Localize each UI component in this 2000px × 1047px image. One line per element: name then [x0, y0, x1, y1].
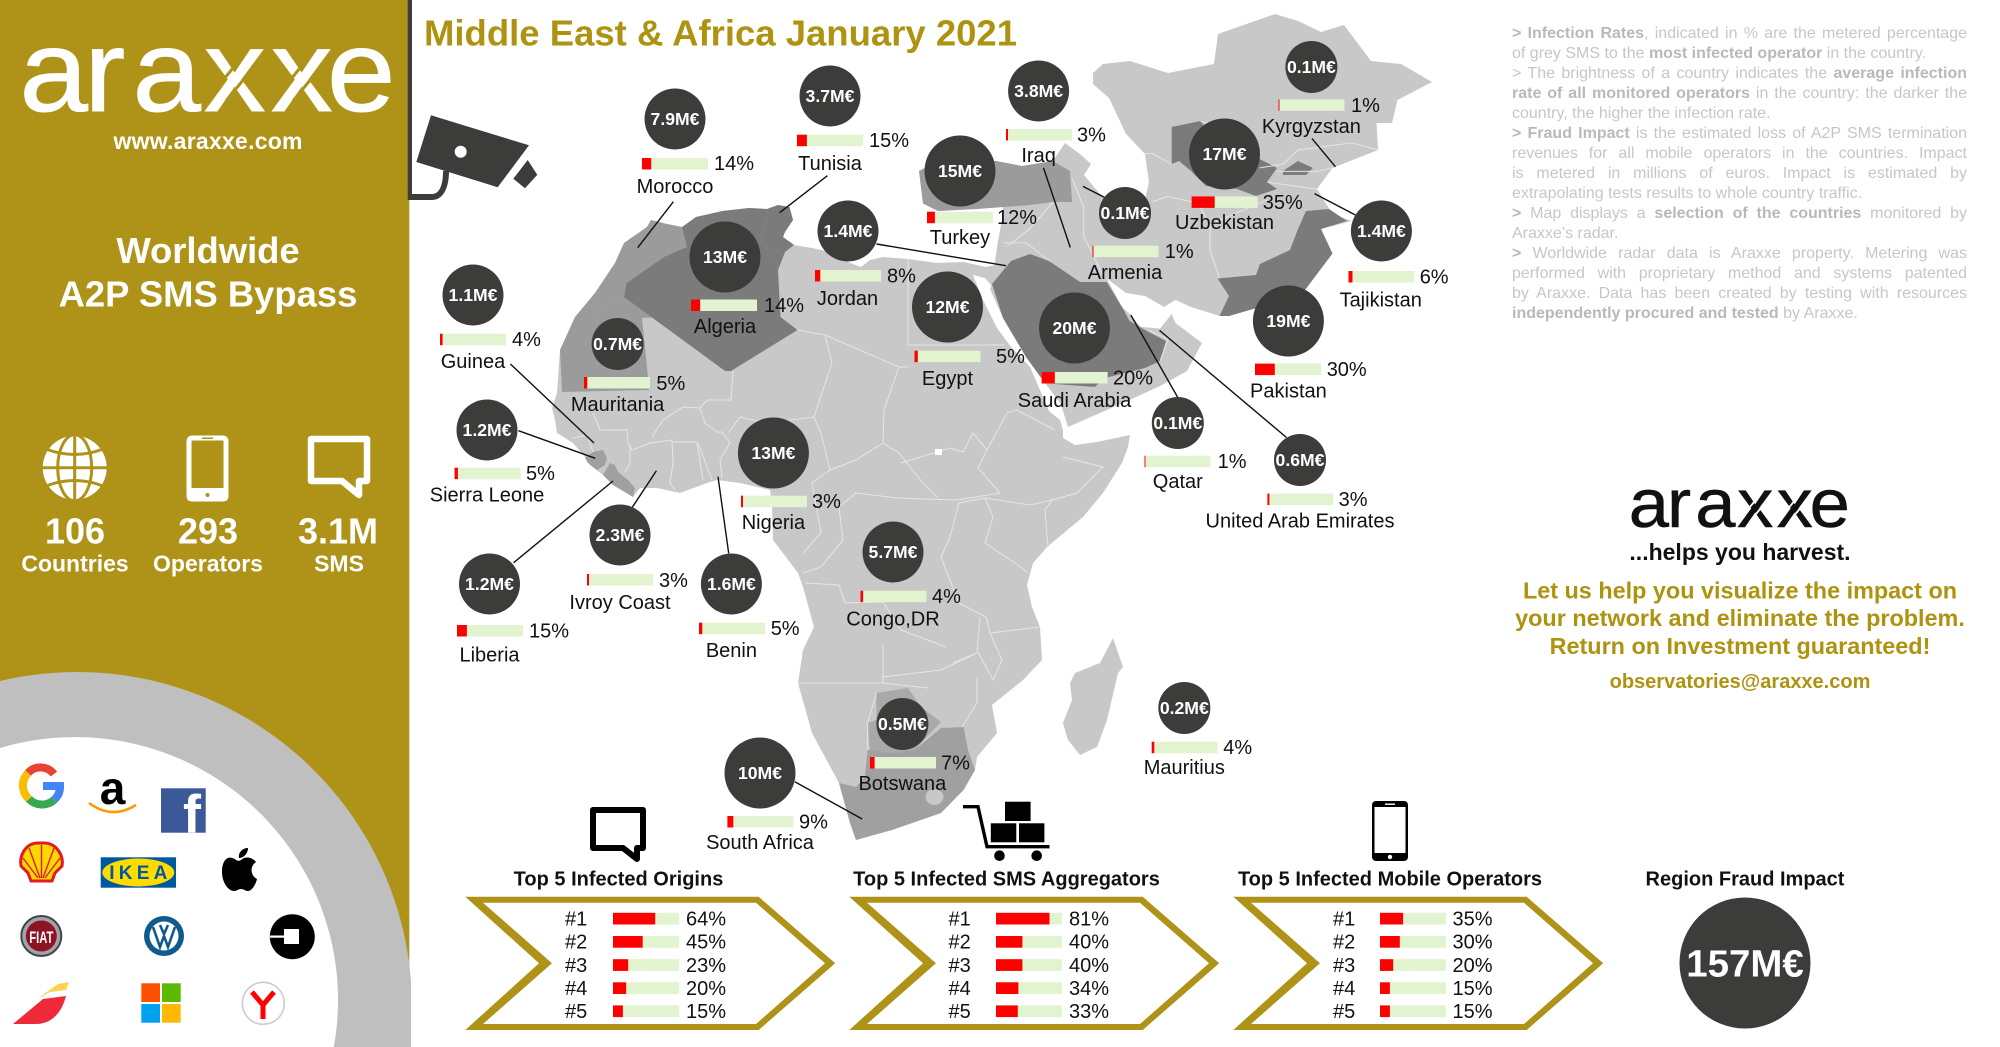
row 3: #3 [948, 955, 971, 977]
title: Middle East & Africa January 2021 [424, 12, 1017, 54]
row 3 [948, 955, 1109, 977]
country: Algeria [690, 222, 804, 338]
country: Saudi Arabia: Saudi Arabia [1018, 390, 1132, 412]
map: Uzbekistan [1172, 121, 1277, 196]
country: United Arab Emirates: United Arab Emirates [1206, 510, 1394, 532]
map: Madagascar [1063, 638, 1123, 755]
country: Benin: 5% [771, 618, 800, 640]
row 2: 40% [1069, 932, 1109, 954]
stat: operators [153, 511, 263, 576]
map: Sierra Leone [585, 450, 607, 470]
heading: aggregators: Top 5 Infected SMS Aggregators [853, 869, 1160, 891]
methodology notes: country, the higher the infection rate. [1512, 105, 1771, 122]
map: Algeria [624, 208, 798, 371]
country: Turkey [924, 136, 1037, 249]
country: Sierra Leone: 5% [526, 463, 555, 485]
logo: uber [270, 914, 315, 959]
country: Jordan: 1.4M€ [824, 221, 873, 241]
country: Tunisia [797, 66, 909, 175]
sidebar heading: A2P SMS Bypass [59, 274, 357, 314]
heading: origins: Top 5 Infected Origins [514, 869, 723, 891]
country: Tunisia: 15% [869, 130, 909, 152]
row 3: 23% [686, 955, 726, 977]
map: Kyrgyz area [1283, 161, 1313, 175]
row 3: 20% [1452, 955, 1493, 977]
map: Botswana [868, 688, 941, 753]
country: Egypt: 5% [996, 346, 1025, 368]
country: Botswana [858, 698, 970, 795]
country: Algeria: Algeria [694, 316, 757, 338]
country: United Arab Emirates: 0.6M€ [1276, 450, 1325, 470]
icon: globe [40, 434, 110, 502]
methodology notes: > Map displays a selection of the countries monitored by [1512, 205, 1967, 222]
row 1: #1 [948, 908, 971, 930]
row 2 [1333, 932, 1493, 954]
country: Kyrgyzstan: 0.1M€ [1287, 57, 1336, 77]
country: Algeria: 14% [764, 295, 804, 317]
country: Pakistan: 19M€ [1266, 311, 1311, 331]
map: Pakistan [1218, 209, 1347, 316]
country: United Arab Emirates: 3% [1339, 489, 1368, 511]
methodology notes [1512, 25, 1967, 322]
row 3: 40% [1069, 955, 1109, 977]
chevron panel: top origins [465, 897, 835, 1030]
logo: iberia [13, 982, 69, 1024]
country: Liberia: Liberia [459, 645, 520, 667]
map: Lesotho [926, 789, 944, 805]
map: Morocco and Western Sahara [560, 220, 687, 350]
logo: facebook: f [183, 785, 202, 845]
country: Qatar: 1% [1218, 451, 1247, 473]
stat: operators: 293 [178, 511, 238, 552]
country: Saudi Arabia [1018, 292, 1153, 412]
chevron panel: top mobile operators [1233, 897, 1603, 1030]
sidebar heading: Worldwide [116, 230, 300, 271]
row 4: 34% [1069, 978, 1109, 1000]
country: Benin: Benin [706, 640, 757, 662]
stat: countries: Countries [21, 550, 129, 576]
row 4 [565, 978, 726, 1000]
row 1: 81% [1069, 908, 1109, 930]
call to action: Let us help you visualize the impact on [1523, 577, 1957, 603]
country: Iraq: 3% [1077, 124, 1106, 146]
row 3 [1333, 955, 1493, 977]
row 1 [948, 908, 1109, 930]
row 5: 15% [1452, 1001, 1493, 1023]
methodology notes: extrapolating tests results to whole country traffic. [1512, 185, 1862, 202]
row 2: #2 [1333, 932, 1355, 954]
logo: google [23, 767, 60, 805]
country: Iraq: Iraq [1021, 145, 1056, 167]
country: Saudi Arabia: 20M€ [1052, 318, 1097, 338]
country: Tunisia: 3.7M€ [806, 86, 855, 106]
row 5: #5 [1333, 1001, 1355, 1023]
country: South Africa [706, 738, 828, 854]
map: Tunisia [760, 205, 794, 270]
stat: countries [21, 511, 129, 576]
country: Mauritius: 0.2M€ [1160, 698, 1209, 718]
country: Saudi Arabia: 20% [1113, 368, 1153, 390]
row 3 [565, 955, 726, 977]
row 5 [1333, 1001, 1493, 1023]
country: Armenia: 0.1M€ [1101, 203, 1150, 223]
country: Liberia: 1.2M€ [465, 574, 514, 594]
methodology notes: rate of all monitored operators in the country: the darker the [1512, 85, 1967, 102]
row 3: #3 [1333, 955, 1355, 977]
logo: fiat: FIAT [29, 928, 54, 947]
country: Mauritius: Mauritius [1144, 757, 1225, 779]
country: Guinea [440, 264, 541, 373]
country: Egypt [912, 272, 1025, 390]
icon: message bubble [311, 439, 367, 495]
methodology notes: of grey SMS to the most infected operator in the country. [1512, 45, 1926, 62]
methodology notes: independently procured and tested by Araxxe. [1512, 305, 1858, 322]
call to action: Return on Investment guaranteed! [1550, 633, 1930, 659]
country: Guinea: 1.1M€ [449, 285, 498, 305]
country: Congo DR: 5.7M€ [869, 542, 918, 562]
row 1: #1 [1333, 908, 1355, 930]
heading: region fraud impact: Region Fraud Impact [1646, 869, 1845, 891]
country: South Africa: 9% [799, 812, 828, 834]
country: Liberia: 15% [529, 620, 569, 642]
icon: mobile phone [1372, 801, 1408, 861]
map: Mauritania [560, 297, 660, 392]
call to action [1515, 577, 1965, 659]
map: African borders [573, 259, 1103, 750]
leader lines [510, 139, 1355, 819]
methodology notes: performed with proprietary method and systems patented [1512, 265, 1967, 282]
icon: cart [963, 802, 1050, 861]
row 2: #2 [948, 932, 971, 954]
methodology notes: Araxxe’s radar. [1512, 225, 1618, 242]
logo: facebook [161, 785, 206, 845]
panel: left sidebar [0, 0, 411, 1047]
country: Guinea: Guinea [441, 351, 506, 373]
methodology notes: > Worldwide radar data is Araxxe property. Metering was [1512, 245, 1967, 262]
country: Qatar: Qatar [1153, 471, 1203, 493]
row 4: 20% [686, 978, 726, 1000]
country: Mauritius: 4% [1223, 737, 1252, 759]
methodology notes: by Araxxe. Data has been created by testing with resources [1512, 285, 1967, 302]
row 2 [565, 932, 726, 954]
country: Mauritania: Mauritania [571, 394, 665, 416]
country: Morocco: 7.9M€ [651, 109, 700, 129]
country: Benin: 1.6M€ [707, 574, 756, 594]
methodology notes: > Infection Rates, indicated in % are the metered percentage [1512, 25, 1967, 42]
stat: sms: SMS [314, 550, 364, 576]
country: Botswana: Botswana [858, 773, 947, 795]
country: Tajikistan: Tajikistan [1340, 289, 1422, 311]
country: Uzbekistan: 17M€ [1202, 144, 1247, 164]
call to action: your network and eliminate the problem. [1515, 605, 1965, 631]
row 5: 15% [686, 1001, 726, 1023]
total impact bubble: 157M€ [1686, 943, 1804, 986]
country: Nigeria [738, 418, 841, 534]
country: Morocco [637, 88, 754, 198]
country: South Africa: 10M€ [738, 763, 782, 783]
country: Guinea: 4% [512, 329, 541, 351]
country: Armenia [1088, 187, 1194, 284]
country: Tunisia: Tunisia [798, 153, 863, 175]
map: Middle East and Africa [552, 14, 1432, 840]
heading: mobile operators: Top 5 Infected Mobile Operators [1238, 869, 1542, 891]
methodology notes: > Fraud Impact is the estimated loss of A2P SMS termination [1512, 125, 1967, 142]
row 5: #5 [565, 1001, 587, 1023]
country: United Arab Emirates [1206, 434, 1394, 532]
row 2 [948, 932, 1109, 954]
chevron panel: top aggregators [849, 897, 1219, 1030]
country: Sierra Leone: Sierra Leone [430, 485, 544, 507]
total impact bubble [1680, 898, 1810, 1028]
map: Saudi Arabia [992, 254, 1166, 387]
row 4 [1333, 978, 1493, 1000]
logo: yandex [242, 982, 284, 1024]
map: Africa mainland [552, 205, 1130, 840]
country: Armenia: Armenia [1088, 262, 1163, 284]
country: Ivory Coast [569, 504, 688, 614]
country: Congo DR: 4% [932, 586, 961, 608]
stat: countries: 106 [45, 511, 105, 552]
camera icon [405, 0, 537, 200]
country: Turkey: Turkey [930, 227, 990, 249]
stat: sms [298, 511, 378, 576]
country: Jordan: 8% [887, 266, 916, 288]
logo: fiat [21, 916, 61, 956]
brand ring [0, 672, 411, 1047]
row 1: 35% [1452, 908, 1493, 930]
country: Ivory Coast: Ivroy Coast [569, 592, 671, 614]
country: Uzbekistan [1175, 118, 1303, 234]
row 5 [948, 1001, 1109, 1023]
row 1: #1 [565, 908, 587, 930]
logo: ikea: IKEA [109, 863, 168, 884]
row 1: 64% [686, 908, 726, 930]
country: Jordan [815, 200, 916, 310]
country: Sierra Leone [430, 400, 555, 507]
tagline: ...helps you harvest. [1629, 539, 1851, 565]
row 2: 30% [1452, 932, 1493, 954]
icon: tablet [187, 438, 228, 501]
sidebar heading [59, 230, 357, 314]
contact email: observatories@araxxe.com [1610, 671, 1870, 693]
country: Pakistan: 30% [1327, 359, 1367, 381]
country: Turkey: 15M€ [938, 161, 982, 181]
country: Egypt: Egypt [922, 368, 974, 390]
country: South Africa: South Africa [706, 832, 815, 854]
country: Kyrgyzstan: Kyrgyzstan [1262, 116, 1361, 138]
country: Egypt: 12M€ [925, 297, 970, 317]
map: Asian borders [1003, 121, 1378, 361]
country: Tajikistan [1340, 200, 1449, 311]
country: Mauritius [1144, 682, 1252, 779]
country: Liberia [457, 554, 569, 667]
logo: shell [21, 843, 62, 881]
icon: origins bubble [593, 810, 643, 859]
row 2: #2 [565, 932, 587, 954]
country: Nigeria: Nigeria [742, 512, 806, 534]
country: Iraq: 3.8M€ [1014, 81, 1063, 101]
country: Kyrgyzstan [1262, 41, 1380, 138]
country: Botswana: 0.5M€ [878, 714, 927, 734]
country: Sierra Leone: 1.2M€ [463, 420, 512, 440]
country: Mauritania [571, 318, 686, 416]
logo: amazon [89, 762, 136, 814]
row 5: #5 [948, 1001, 971, 1023]
logo: apple [222, 848, 257, 891]
methodology notes: revenues for all mobile operators in the countries. Impact [1512, 145, 1967, 162]
stat: sms: 3.1M [298, 511, 378, 552]
country: Uzbekistan: 35% [1263, 192, 1303, 214]
country: Morocco: Morocco [637, 176, 713, 198]
country: Mauritania: 5% [656, 373, 686, 395]
country: Tajikistan: 1.4M€ [1357, 221, 1406, 241]
row 4: #4 [948, 978, 971, 1000]
row 3: #3 [565, 955, 587, 977]
row 4: #4 [565, 978, 587, 1000]
logo: microsoft [141, 983, 181, 1023]
logo: amazon: a [100, 762, 126, 814]
country: Congo DR [846, 522, 961, 631]
map: Turkey [919, 161, 1072, 211]
country: Nigeria: 3% [812, 491, 841, 513]
country: Ivory Coast: 3% [659, 570, 688, 592]
country: Pakistan [1250, 286, 1367, 402]
country: Jordan: Jordan [817, 288, 878, 310]
map: Liberia [603, 463, 635, 497]
country: Uzbekistan: Uzbekistan [1175, 212, 1274, 234]
country: Pakistan: Pakistan [1250, 380, 1327, 402]
country: Qatar [1144, 397, 1247, 493]
country: Armenia: 1% [1165, 241, 1194, 263]
logo: volkswagen [144, 916, 184, 956]
row 5 [565, 1001, 726, 1023]
website address: www.araxxe.com [112, 128, 302, 154]
country: Algeria: 13M€ [703, 247, 747, 267]
map: South Africa [839, 727, 975, 840]
country: Botswana: 7% [941, 752, 970, 774]
row 1 [565, 908, 726, 930]
country: Nigeria: 13M€ [751, 443, 796, 463]
country: Ivory Coast: 2.3M€ [596, 525, 645, 545]
row 5: 33% [1069, 1001, 1109, 1023]
country: Congo DR: Congo,DR [846, 609, 940, 631]
map: Middle East and Central Asia [919, 14, 1432, 427]
methodology notes: is metered in millions of euros. Impact is estimated by [1512, 165, 1967, 182]
row 1 [1333, 908, 1493, 930]
row 4 [948, 978, 1109, 1000]
country: Benin [699, 554, 800, 662]
logo: ikea [101, 857, 176, 888]
country: Turkey: 12% [997, 207, 1037, 229]
country: Morocco: 14% [714, 153, 754, 175]
row 4: 15% [1452, 978, 1493, 1000]
country: Kyrgyzstan: 1% [1351, 95, 1380, 117]
country: Iraq [1006, 60, 1106, 167]
methodology notes: > The brightness of a country indicates the average infection [1512, 65, 1967, 82]
row 2: 45% [686, 932, 726, 954]
sidebar logo: araxxe: araxxe [20, 7, 395, 136]
stat: operators: Operators [153, 550, 263, 576]
right logo: araxxe: araxxe [1629, 465, 1850, 542]
country: Qatar: 0.1M€ [1153, 413, 1202, 433]
country: Mauritania: 0.7M€ [593, 334, 642, 354]
map: lake spot [935, 449, 942, 455]
country: Tajikistan: 6% [1420, 266, 1449, 288]
row 4: #4 [1333, 978, 1355, 1000]
